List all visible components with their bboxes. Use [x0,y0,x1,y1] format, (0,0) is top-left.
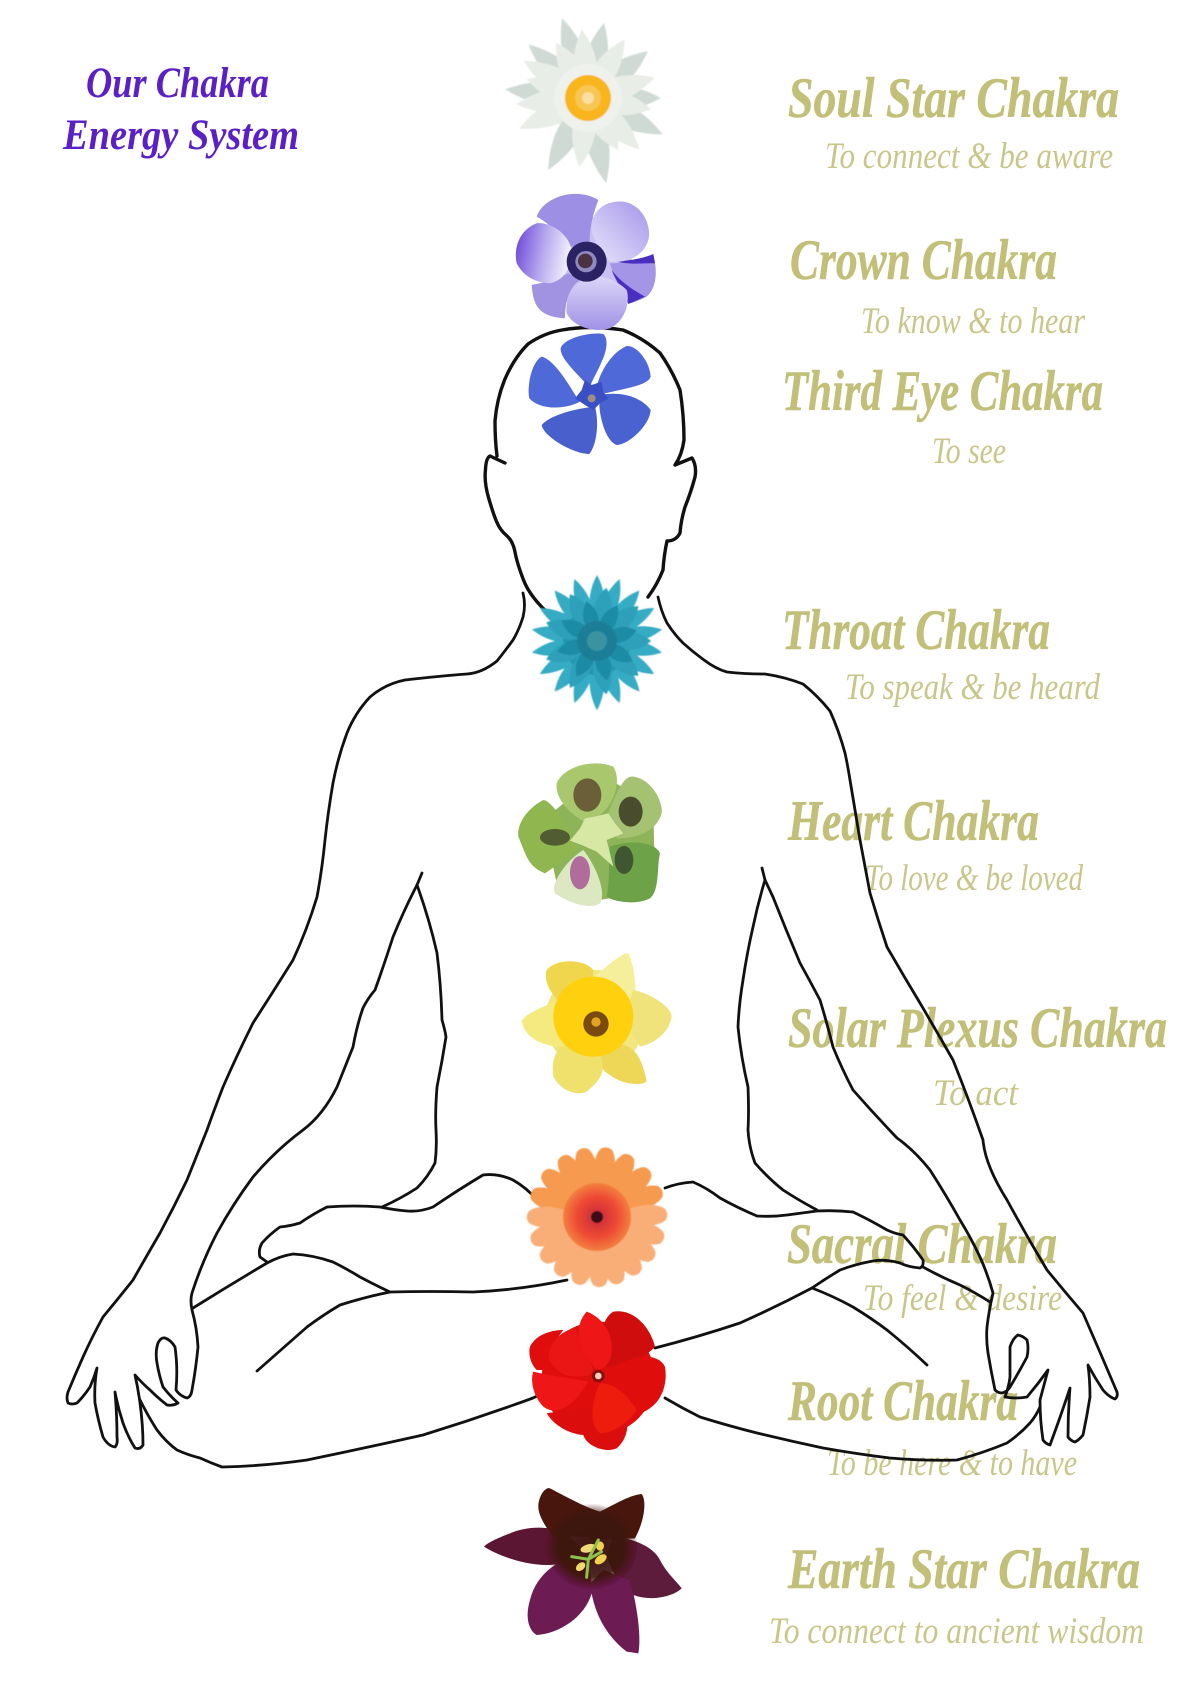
chakra labels [769,67,1167,1652]
right foot and knee [655,1182,923,1348]
title: Our Chakra [86,60,269,107]
label: heart chakra [787,790,1083,899]
label: crown chakra: To know & to hear [861,301,1085,342]
icon: soul star lotus flower [504,15,668,186]
left inner thigh [257,1280,567,1371]
icon: root red impatiens [529,1311,666,1450]
seated body outline [67,328,1117,1467]
label: solar plexus chakra: To act [933,1073,1020,1114]
label: third eye chakra: Third Eye Chakra [782,360,1103,423]
label: heart chakra: Heart Chakra [787,790,1039,853]
label: heart chakra: To love & be loved [865,858,1083,899]
label: root chakra: Root Chakra [787,1370,1018,1433]
label: sacral chakra [787,1213,1062,1319]
label: crown chakra: Crown Chakra [790,229,1057,292]
icon: sacral orange gerbera [527,1146,668,1288]
label: throat chakra: To speak & be heard [845,667,1100,708]
neck and left shoulder [67,593,524,1449]
icon: earth star dark lily [484,1488,682,1653]
label: third eye chakra: To see [932,431,1006,472]
label: sacral chakra: To feel & desire [863,1278,1062,1319]
label: earth star chakra [769,1538,1144,1652]
title [62,60,299,159]
label: sacral chakra: Sacral Chakra [787,1213,1057,1276]
label: soul star chakra: To connect & be aware [825,136,1113,177]
label: soul star chakra [788,67,1119,177]
icon: heart green geranium [518,763,662,906]
head, ears and jaw [485,328,696,615]
right inner thigh [812,1288,927,1365]
label: root chakra: To be here & to have [827,1443,1077,1484]
label: throat chakra [782,599,1100,708]
icon: third eye periwinkle flower [529,334,651,454]
left foot and calf [259,1175,537,1262]
right torso side [738,880,817,1210]
label: soul star chakra: Soul Star Chakra [788,67,1119,130]
left torso side [382,885,446,1207]
label: third eye chakra [782,360,1103,472]
label: solar plexus chakra [788,997,1167,1114]
icon: solar plexus daffodil [522,953,672,1093]
right knee to wrist [923,1267,990,1302]
left lower leg [140,1380,570,1467]
icon: throat teal chrysanthemum [531,575,663,710]
left knee line [193,1254,390,1308]
label: throat chakra: Throat Chakra [782,599,1050,662]
label: crown chakra [790,229,1085,342]
icon: crown anemone flower [516,194,656,330]
label: root chakra [787,1370,1077,1484]
right lower leg [665,1398,1040,1460]
label: earth star chakra: To connect to ancient wisdom [769,1611,1144,1652]
title: Energy System [62,112,299,159]
right neck and shoulder arm [658,597,1117,1445]
